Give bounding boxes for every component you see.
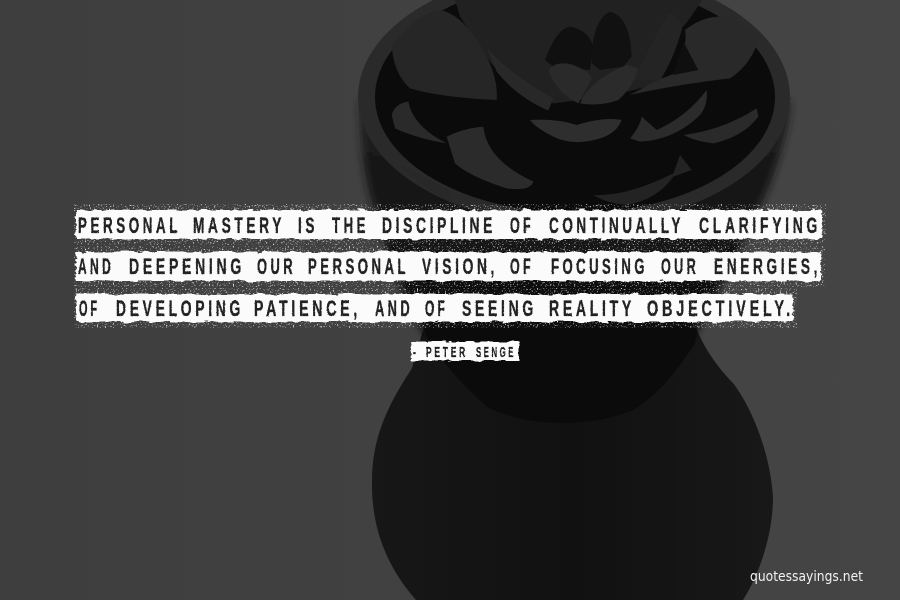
strip: line 2 [76, 252, 821, 281]
author attribution: SENGE [476, 344, 516, 361]
pot bowl bottom [423, 328, 697, 423]
author attribution [411, 342, 519, 361]
speckled strip edges [74, 204, 826, 328]
quote line 1: DISCIPLINE [382, 213, 496, 238]
quote line 2: FOCUSING [551, 254, 648, 279]
quote line 2: OF [510, 254, 534, 279]
quote line 2: VISION, [422, 254, 498, 279]
quote text strips [74, 204, 826, 328]
quote line 2: ENERGIES, [714, 254, 821, 279]
quote line 1: OF [510, 213, 534, 238]
quote line 2: OUR [661, 254, 699, 279]
quote line 2 [78, 254, 821, 279]
quote line 3: SEEING [462, 296, 537, 321]
strip: line 3 [76, 294, 793, 322]
pot base [372, 330, 773, 600]
quote line 3 [79, 296, 794, 321]
quote line 2: DEEPENING [129, 254, 245, 279]
quote line 2: AND [78, 254, 114, 279]
quote line 3: OF [425, 296, 448, 321]
quote line 1: CONTINUALLY [549, 213, 684, 238]
author attribution: PETER [426, 344, 468, 361]
potted succulent photo [358, 0, 790, 600]
quote line 1: MASTERY [193, 213, 285, 238]
strip: line 1 [76, 210, 822, 239]
quote line 1: CLARIFYING [699, 213, 821, 238]
quote line 2: PERSONAL [308, 254, 409, 279]
pot interior [375, 0, 775, 213]
pot bowl upper body [360, 100, 790, 335]
pot rim [358, 0, 790, 225]
quote line 3: DEVELOPING [116, 296, 244, 321]
quote line 1: PERSONAL [78, 213, 181, 238]
quote line 1: THE [332, 213, 369, 238]
quote line 1: IS [298, 213, 318, 238]
quote line 3: OF [79, 296, 100, 321]
quote line 3: AND [375, 296, 413, 321]
quote line 3: PATIENCE, [254, 296, 361, 321]
quote line 1 [78, 213, 821, 238]
quote line 2: OUR [257, 254, 296, 279]
quote line 3: REALITY [549, 296, 635, 321]
succulent leaves [392, 0, 759, 205]
quote line 3: OBJECTIVELY. [647, 296, 794, 321]
watermark: quotessayings.net [750, 569, 863, 585]
author attribution: - [413, 344, 419, 361]
